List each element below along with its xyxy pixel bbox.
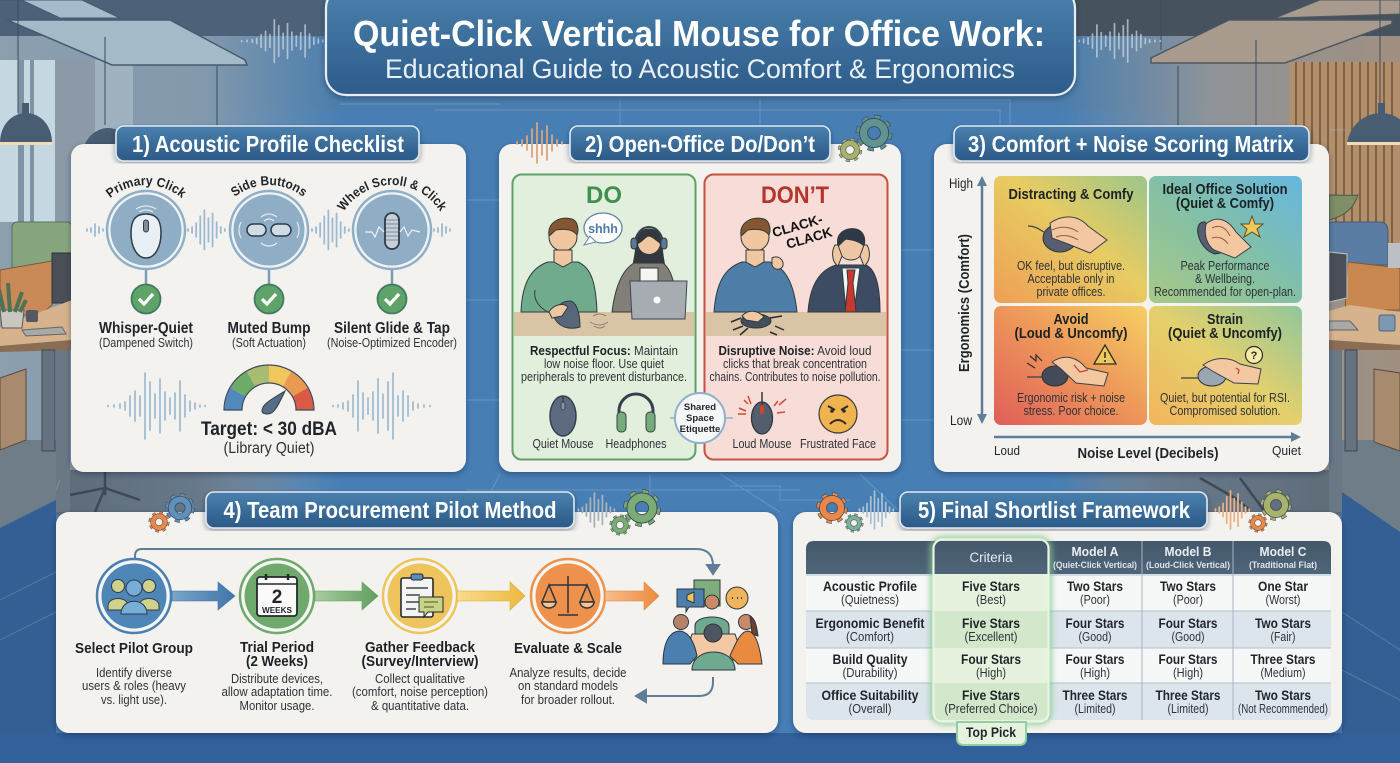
panel 5: final shortlist framework — [793, 491, 1342, 745]
row: build quality: Three Stars — [1250, 651, 1316, 667]
icon: loud mouse: Loud Mouse — [732, 436, 792, 451]
gauge target label — [201, 419, 337, 457]
row: office suitability: Three Stars — [1156, 687, 1221, 703]
blueprint lines — [56, 100, 1345, 512]
step 2: trial period: Monitor usage. — [240, 698, 314, 713]
row: acoustic profile: Five Stars — [962, 578, 1020, 594]
row: build quality: Four Stars — [1158, 651, 1218, 667]
panel 5 left decoration — [819, 491, 893, 531]
row: acoustic profile: Two Stars — [1067, 578, 1123, 594]
item: primary click — [99, 178, 194, 350]
row: office suitability: Office Suitability — [822, 687, 919, 703]
step 2: trial period: WEEKS — [262, 605, 292, 615]
step 3: gather feedback: (comfort, noise perception) — [352, 684, 488, 699]
quadrant: avoid: (Loud & Uncomfy) — [1014, 325, 1128, 342]
step 3: gather feedback: Gather Feedback — [365, 639, 476, 656]
row: office suitability: (Not Recommended) — [1238, 702, 1328, 716]
top pick tab — [957, 722, 1026, 745]
arrow 4 — [605, 582, 659, 610]
panel 4 heading: 4) Team Procurement Pilot Method — [224, 497, 556, 523]
gear icons — [840, 118, 889, 160]
panel 4 right decoration — [578, 492, 658, 534]
horizontal axis: Loud — [994, 443, 1020, 458]
row: ergonomic benefit: Five Stars — [962, 615, 1020, 631]
frustrated coworker — [808, 229, 880, 312]
arrow 2 — [315, 582, 378, 610]
row: acoustic profile: (Poor) — [1080, 593, 1110, 607]
row: acoustic profile: (Best) — [976, 593, 1006, 607]
table header models: (Traditional Flat) — [1249, 560, 1317, 571]
step 1: select pilot group: vs. light use). — [101, 692, 167, 707]
step 3: gather feedback — [352, 559, 488, 713]
right desk — [1329, 195, 1400, 451]
step 2: trial period: 2 — [272, 587, 282, 608]
row: acoustic profile: (Quietness) — [841, 593, 899, 607]
quadrant: avoid: Ergonomic risk + noise — [1017, 390, 1125, 405]
quadrant: distracting and comfy: OK feel, but disruptive. — [1017, 258, 1125, 273]
panel 1: acoustic profile checklist — [68, 124, 469, 477]
row: build quality: (Medium) — [1260, 666, 1306, 680]
person with quiet mouse — [521, 218, 597, 328]
panel 4 heading — [206, 492, 574, 528]
do message: peripherals to prevent disturbance. — [521, 369, 687, 384]
don't message — [710, 343, 880, 384]
panel 1 heading: 1) Acoustic Profile Checklist — [132, 131, 404, 157]
clack-clack text — [770, 210, 834, 255]
row: build quality: Build Quality — [832, 651, 908, 667]
icon: quiet mouse: Quiet Mouse — [532, 436, 594, 451]
main title: Quiet-Click Vertical Mouse for Office Work: — [353, 13, 1045, 54]
step 4: evaluate and scale: on standard models — [518, 678, 618, 693]
criteria highlight column — [933, 539, 1049, 722]
step 3: gather feedback: Collect qualitative — [375, 671, 465, 686]
icon: loud mouse — [732, 392, 792, 451]
row: build quality: (High) — [1080, 666, 1110, 680]
don't message: Disruptive Noise: Avoid loud — [718, 343, 872, 358]
step 2: trial period: (2 Weeks) — [246, 653, 308, 670]
item: side buttons: Muted Bump — [228, 320, 311, 337]
subtitle: Educational Guide to Acoustic Comfort & Ergonomics — [385, 54, 1015, 84]
team discussion illustration — [663, 580, 762, 670]
step 1: select pilot group: Select Pilot Group — [75, 640, 193, 657]
row: office suitability: (Preferred Choice) — [944, 702, 1038, 716]
title banner — [326, 0, 1075, 95]
horizontal axis — [994, 432, 1301, 462]
step 1: select pilot group: users & roles (heavy — [82, 678, 187, 693]
top pick tab: Top Pick — [966, 725, 1016, 740]
item: wheel scroll and click: (Noise-Optimized Encoder) — [327, 336, 457, 350]
item: primary click: Whisper-Quiet — [99, 320, 194, 337]
row: acoustic profile: (Worst) — [1266, 593, 1300, 607]
vertical axis: Ergonomics (Comfort) — [957, 234, 973, 372]
panel 4: team procurement pilot method — [56, 492, 778, 733]
checklist waveforms — [87, 210, 450, 250]
do column — [512, 174, 696, 460]
clack-clack text: CLACK- — [770, 212, 824, 240]
row: office suitability — [822, 687, 1328, 716]
do message: Respectful Focus: Maintain — [530, 343, 678, 358]
step 4: evaluate and scale: Analyze results, decide — [510, 665, 626, 680]
step 1: select pilot group: Identify diverse — [96, 665, 172, 680]
vertical axis — [949, 176, 987, 428]
panel 5 right decoration — [1216, 491, 1289, 531]
step 2: trial period: Distribute devices, — [231, 671, 323, 686]
shhh speech bubble — [584, 213, 622, 245]
row: office suitability: Five Stars — [962, 687, 1020, 703]
item: side buttons: Side Buttons — [231, 176, 306, 196]
horizontal axis: Quiet — [1272, 443, 1301, 458]
don't message: chains. Contributes to noise pollution. — [710, 369, 880, 384]
step 1: select pilot group — [75, 559, 193, 707]
row: office suitability: (Limited) — [1168, 702, 1208, 716]
panel 2 heading: 2) Open-Office Do/Don’t — [585, 131, 815, 157]
shared space etiquette badge: Etiquette — [680, 424, 720, 435]
step 2: trial period — [222, 559, 332, 713]
don't column — [704, 174, 888, 460]
step 4: evaluate and scale: Evaluate & Scale — [514, 640, 622, 657]
item: side buttons: (Soft Actuation) — [232, 336, 306, 350]
quadrant: ideal office solution: & Wellbeing. — [1195, 271, 1255, 286]
row: ergonomic benefit: Two Stars — [1255, 615, 1311, 631]
do message — [521, 343, 687, 384]
row: ergonomic benefit — [816, 615, 1311, 644]
row: ergonomic benefit: (Good) — [1078, 630, 1112, 644]
panel 3 heading: 3) Comfort + Noise Scoring Matrix — [968, 131, 1294, 157]
floor — [0, 345, 1400, 763]
item: wheel scroll and click: Silent Glide & Tap — [334, 320, 450, 337]
panel 1 heading — [116, 126, 419, 161]
quadrant: ideal office solution: (Quiet & Comfy) — [1176, 195, 1274, 212]
noise gauge — [224, 365, 314, 414]
icon: headphones — [606, 394, 666, 451]
row: acoustic profile: (Poor) — [1173, 593, 1203, 607]
quadrant: avoid — [994, 306, 1147, 425]
row: build quality: Four Stars — [961, 651, 1021, 667]
waveforms beside title — [242, 20, 1160, 62]
quadrant: strain: Quiet, but potential for RSI. — [1160, 390, 1290, 405]
icon: frustrated face — [800, 395, 876, 451]
item: wheel scroll and click: Wheel Scroll & Click — [336, 176, 446, 212]
panel 2: open-office do and don't — [499, 118, 901, 472]
table header models — [1053, 544, 1317, 571]
panel 4 gears — [150, 496, 192, 531]
person clicking loudly — [714, 218, 797, 328]
gauge waveforms — [108, 373, 430, 439]
panel 5 heading: 5) Final Shortlist Framework — [918, 497, 1190, 523]
vertical axis: High — [949, 176, 973, 191]
quadrant: ideal office solution — [1149, 176, 1302, 303]
feedback loop arrow bottom — [636, 677, 713, 702]
quadrant: distracting and comfy — [994, 176, 1147, 303]
shared space etiquette badge: Shared — [684, 402, 716, 413]
item: primary click: Primary Click — [105, 178, 186, 198]
quadrant: distracting and comfy: Acceptable only in — [1028, 271, 1114, 286]
row: ergonomic benefit: (Good) — [1172, 630, 1204, 644]
row: office suitability: Three Stars — [1062, 687, 1128, 703]
row: ergonomic benefit: Four Stars — [1066, 615, 1125, 631]
panel 5 heading — [900, 492, 1207, 528]
horizontal axis: Noise Level (Decibels) — [1078, 446, 1219, 462]
quadrant: strain — [1149, 306, 1302, 425]
comparison table — [806, 539, 1331, 722]
gauge target label: (Library Quiet) — [224, 440, 314, 457]
quadrant: avoid: stress. Poor choice. — [1024, 403, 1118, 418]
decorative waveform — [517, 123, 562, 163]
shared space etiquette badge: Space — [686, 413, 714, 424]
feedback loop arrow top — [135, 549, 719, 574]
step 4: evaluate and scale: for broader rollout. — [521, 692, 615, 707]
item: wheel scroll and click — [327, 176, 457, 350]
quadrant: distracting and comfy: private offices. — [1036, 284, 1106, 299]
row: build quality — [832, 651, 1316, 680]
row: acoustic profile: One Star — [1258, 578, 1308, 594]
panel 2 heading — [570, 126, 830, 161]
icon: quiet mouse — [532, 396, 594, 451]
table header models: (Loud-Click Vertical) — [1146, 560, 1230, 571]
panel 3 heading — [954, 126, 1309, 161]
row: ergonomic benefit: (Excellent) — [964, 630, 1018, 644]
table header models: Model C — [1260, 544, 1307, 559]
item: primary click: (Dampened Switch) — [99, 336, 193, 350]
ceiling panels — [0, 0, 1400, 130]
lamps — [0, 103, 1400, 145]
quadrant: strain: Compromised solution. — [1170, 403, 1280, 418]
row: office suitability: (Limited) — [1074, 702, 1116, 716]
table header models: Model B — [1164, 544, 1212, 559]
table header models: (Quiet-Click Vertical) — [1053, 560, 1137, 571]
row: build quality: (Durability) — [842, 666, 898, 680]
don't message: clicks that break concentration — [723, 356, 867, 371]
row: acoustic profile: Acoustic Profile — [823, 578, 917, 594]
row: acoustic profile — [823, 578, 1308, 607]
row: ergonomic benefit: Four Stars — [1158, 615, 1218, 631]
quadrant: ideal office solution: Recommended for open-plan. — [1154, 284, 1296, 299]
row: ergonomic benefit: Ergonomic Benefit — [816, 615, 925, 631]
shhh speech bubble: shhh — [588, 222, 618, 236]
do column: DO — [586, 182, 622, 209]
do message: low noise floor. Use quiet — [544, 356, 664, 371]
quadrant: avoid: Avoid — [1054, 311, 1088, 328]
step 2: trial period: Trial Period — [240, 639, 314, 656]
panel 3: comfort and noise matrix — [934, 126, 1329, 472]
step 4: evaluate and scale — [510, 559, 626, 707]
quadrant: ideal office solution: Peak Performance — [1180, 258, 1270, 273]
row: build quality: Four Stars — [1066, 651, 1125, 667]
shared space etiquette badge — [670, 393, 733, 443]
don't column: DON’T — [761, 182, 829, 209]
quadrant: distracting and comfy: Distracting & Comfy — [1008, 186, 1134, 203]
person with headphones and laptop — [612, 227, 687, 319]
step 2: trial period: allow adaptation time. — [222, 684, 332, 699]
row: acoustic profile: Two Stars — [1160, 578, 1216, 594]
row: office suitability: Two Stars — [1255, 687, 1311, 703]
icon: headphones: Headphones — [606, 436, 666, 451]
clack-clack text: CLACK — [784, 224, 834, 252]
quadrant: strain: Strain — [1207, 311, 1243, 328]
quadrant: strain: ? — [1251, 350, 1258, 362]
row: build quality: (High) — [1173, 666, 1203, 680]
row: build quality: (High) — [976, 666, 1006, 680]
row: ergonomic benefit: (Fair) — [1270, 630, 1296, 644]
step 3: gather feedback: (Survey/Interview) — [362, 653, 478, 670]
criteria highlight column: Criteria — [970, 550, 1013, 565]
table header models: Model A — [1072, 544, 1119, 559]
icon: frustrated face: Frustrated Face — [800, 436, 876, 451]
arrow 3 — [457, 582, 525, 610]
step 3: gather feedback: & quantitative data. — [371, 698, 469, 713]
gauge target label: Target: < 30 dBA — [201, 419, 337, 440]
row: office suitability: (Overall) — [848, 702, 892, 716]
left desk — [0, 222, 72, 451]
quadrant: ideal office solution: Ideal Office Solution — [1162, 181, 1288, 198]
arrow 1 — [172, 582, 235, 610]
row: ergonomic benefit: (Comfort) — [846, 630, 894, 644]
item: side buttons — [228, 176, 311, 350]
quadrant: strain: (Quiet & Uncomfy) — [1168, 325, 1282, 342]
vertical axis: Low — [950, 413, 972, 428]
